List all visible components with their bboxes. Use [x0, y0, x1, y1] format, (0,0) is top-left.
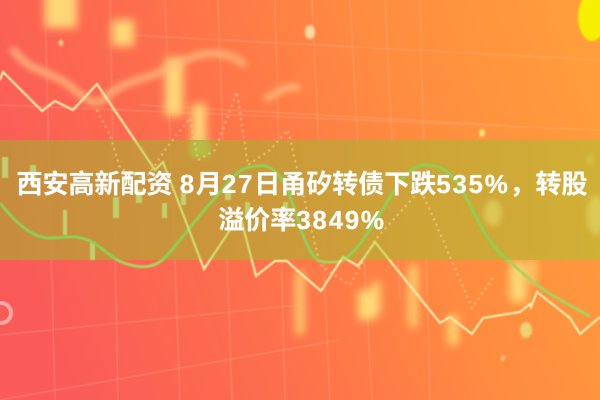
- candles: [2, 157, 288, 260]
- band glows: [190, 140, 600, 235]
- title: 溢价率3849%: [218, 205, 386, 235]
- blurred wave: [12, 48, 300, 102]
- title: 西安高新配资 8月27日甬矽转债下跌535%，转股: [16, 169, 588, 199]
- bright yellow blob: [578, 0, 600, 41]
- green moving average line: [0, 165, 590, 316]
- small dots: [59, 25, 532, 361]
- blurred candles: [45, 0, 536, 345]
- translucent band: [0, 140, 600, 260]
- ring: [0, 303, 11, 323]
- pale price line: [0, 72, 600, 334]
- title: [16, 169, 588, 235]
- dotted line series: [97, 92, 495, 308]
